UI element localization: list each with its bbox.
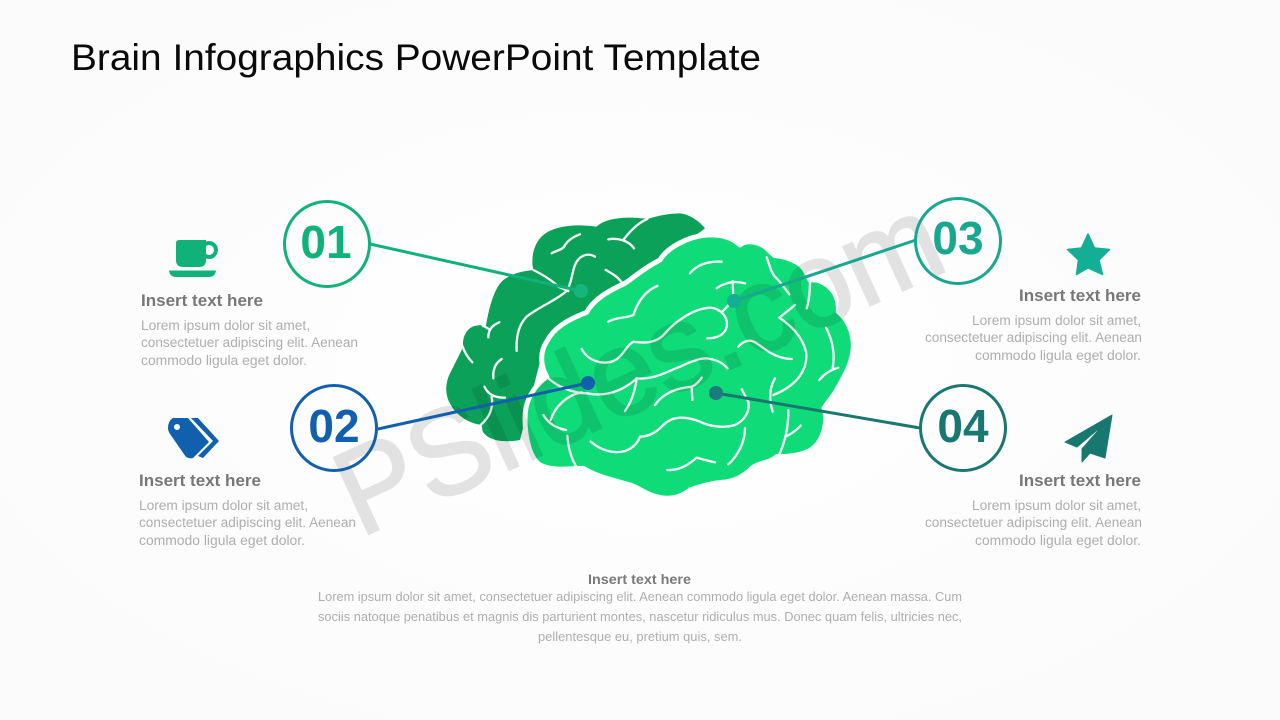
text block 2: Insert text here [139,471,261,490]
text block 3: consectetuer adipiscing elit. Aenean [925,330,1142,345]
watermark: PSlides.com [314,168,962,562]
bottom text block: pellentesque eu, pretium quis, sem. [538,630,742,644]
marker dot 02 [581,376,595,390]
callout 04 [709,386,1006,470]
text block 1: Insert text here [141,291,263,310]
number 02: 02 [308,400,360,452]
text block 4: Lorem ipsum dolor sit amet, [972,498,1141,513]
number 04: 04 [937,400,989,452]
callout 02 [292,376,595,470]
icon: paper plane [1065,415,1112,462]
connector line 02 [378,383,588,429]
brain: front light lobe [525,235,853,498]
bottom text block: Lorem ipsum dolor sit amet, consectetuer adipiscing elit. Aenean commodo ligula eget dolor. Aenean massa. Cum [318,590,962,604]
connector line 01 [370,244,581,291]
text block 1 [141,291,358,368]
bottom text block: Insert text here [588,572,692,587]
connector line 04 [716,393,920,428]
text block 1: commodo ligula eget dolor. [141,353,307,368]
text block 3 [925,286,1142,363]
number 03: 03 [932,212,984,264]
text block 2 [139,471,356,548]
icon: price tags [168,418,219,458]
callout 03 [727,198,1000,308]
text block 1: consectetuer adipiscing elit. Aenean [141,335,358,350]
text block 3: commodo ligula eget dolor. [975,348,1141,363]
callout 01 [284,202,588,298]
number circle 01 [284,202,370,286]
number 01: 01 [300,216,352,268]
number circle 02 [292,386,376,470]
marker dot 03 [727,294,741,308]
text block 4 [925,471,1142,548]
icon: coffee cup [169,240,216,277]
brain: back dark lobe [446,213,705,441]
text block 3: Lorem ipsum dolor sit amet, [972,313,1141,328]
text block 4: consectetuer adipiscing elit. Aenean [925,515,1142,530]
icon: star [1068,234,1110,274]
text block 2: commodo ligula eget dolor. [139,533,305,548]
connector line 03 [734,240,916,301]
bottom text block: sociis natoque penatibus et magnis dis parturient montes, nascetur ridiculus mus. Donec quam felis, ultricies nec, [318,610,962,624]
marker dot 01 [574,284,588,298]
number circle 03 [916,198,1000,284]
bottom text block [318,572,962,644]
text block 2: consectetuer adipiscing elit. Aenean [139,515,356,530]
marker dot 04 [709,386,723,400]
text block 3: Insert text here [1019,286,1141,305]
number circle 04 [920,386,1006,470]
text block 2: Lorem ipsum dolor sit amet, [139,498,308,513]
text block 4: Insert text here [1019,471,1141,490]
text block 4: commodo ligula eget dolor. [975,533,1141,548]
title: Brain Infographics PowerPoint Template [71,37,761,78]
text block 1: Lorem ipsum dolor sit amet, [141,318,310,333]
brain illustration [446,213,853,498]
